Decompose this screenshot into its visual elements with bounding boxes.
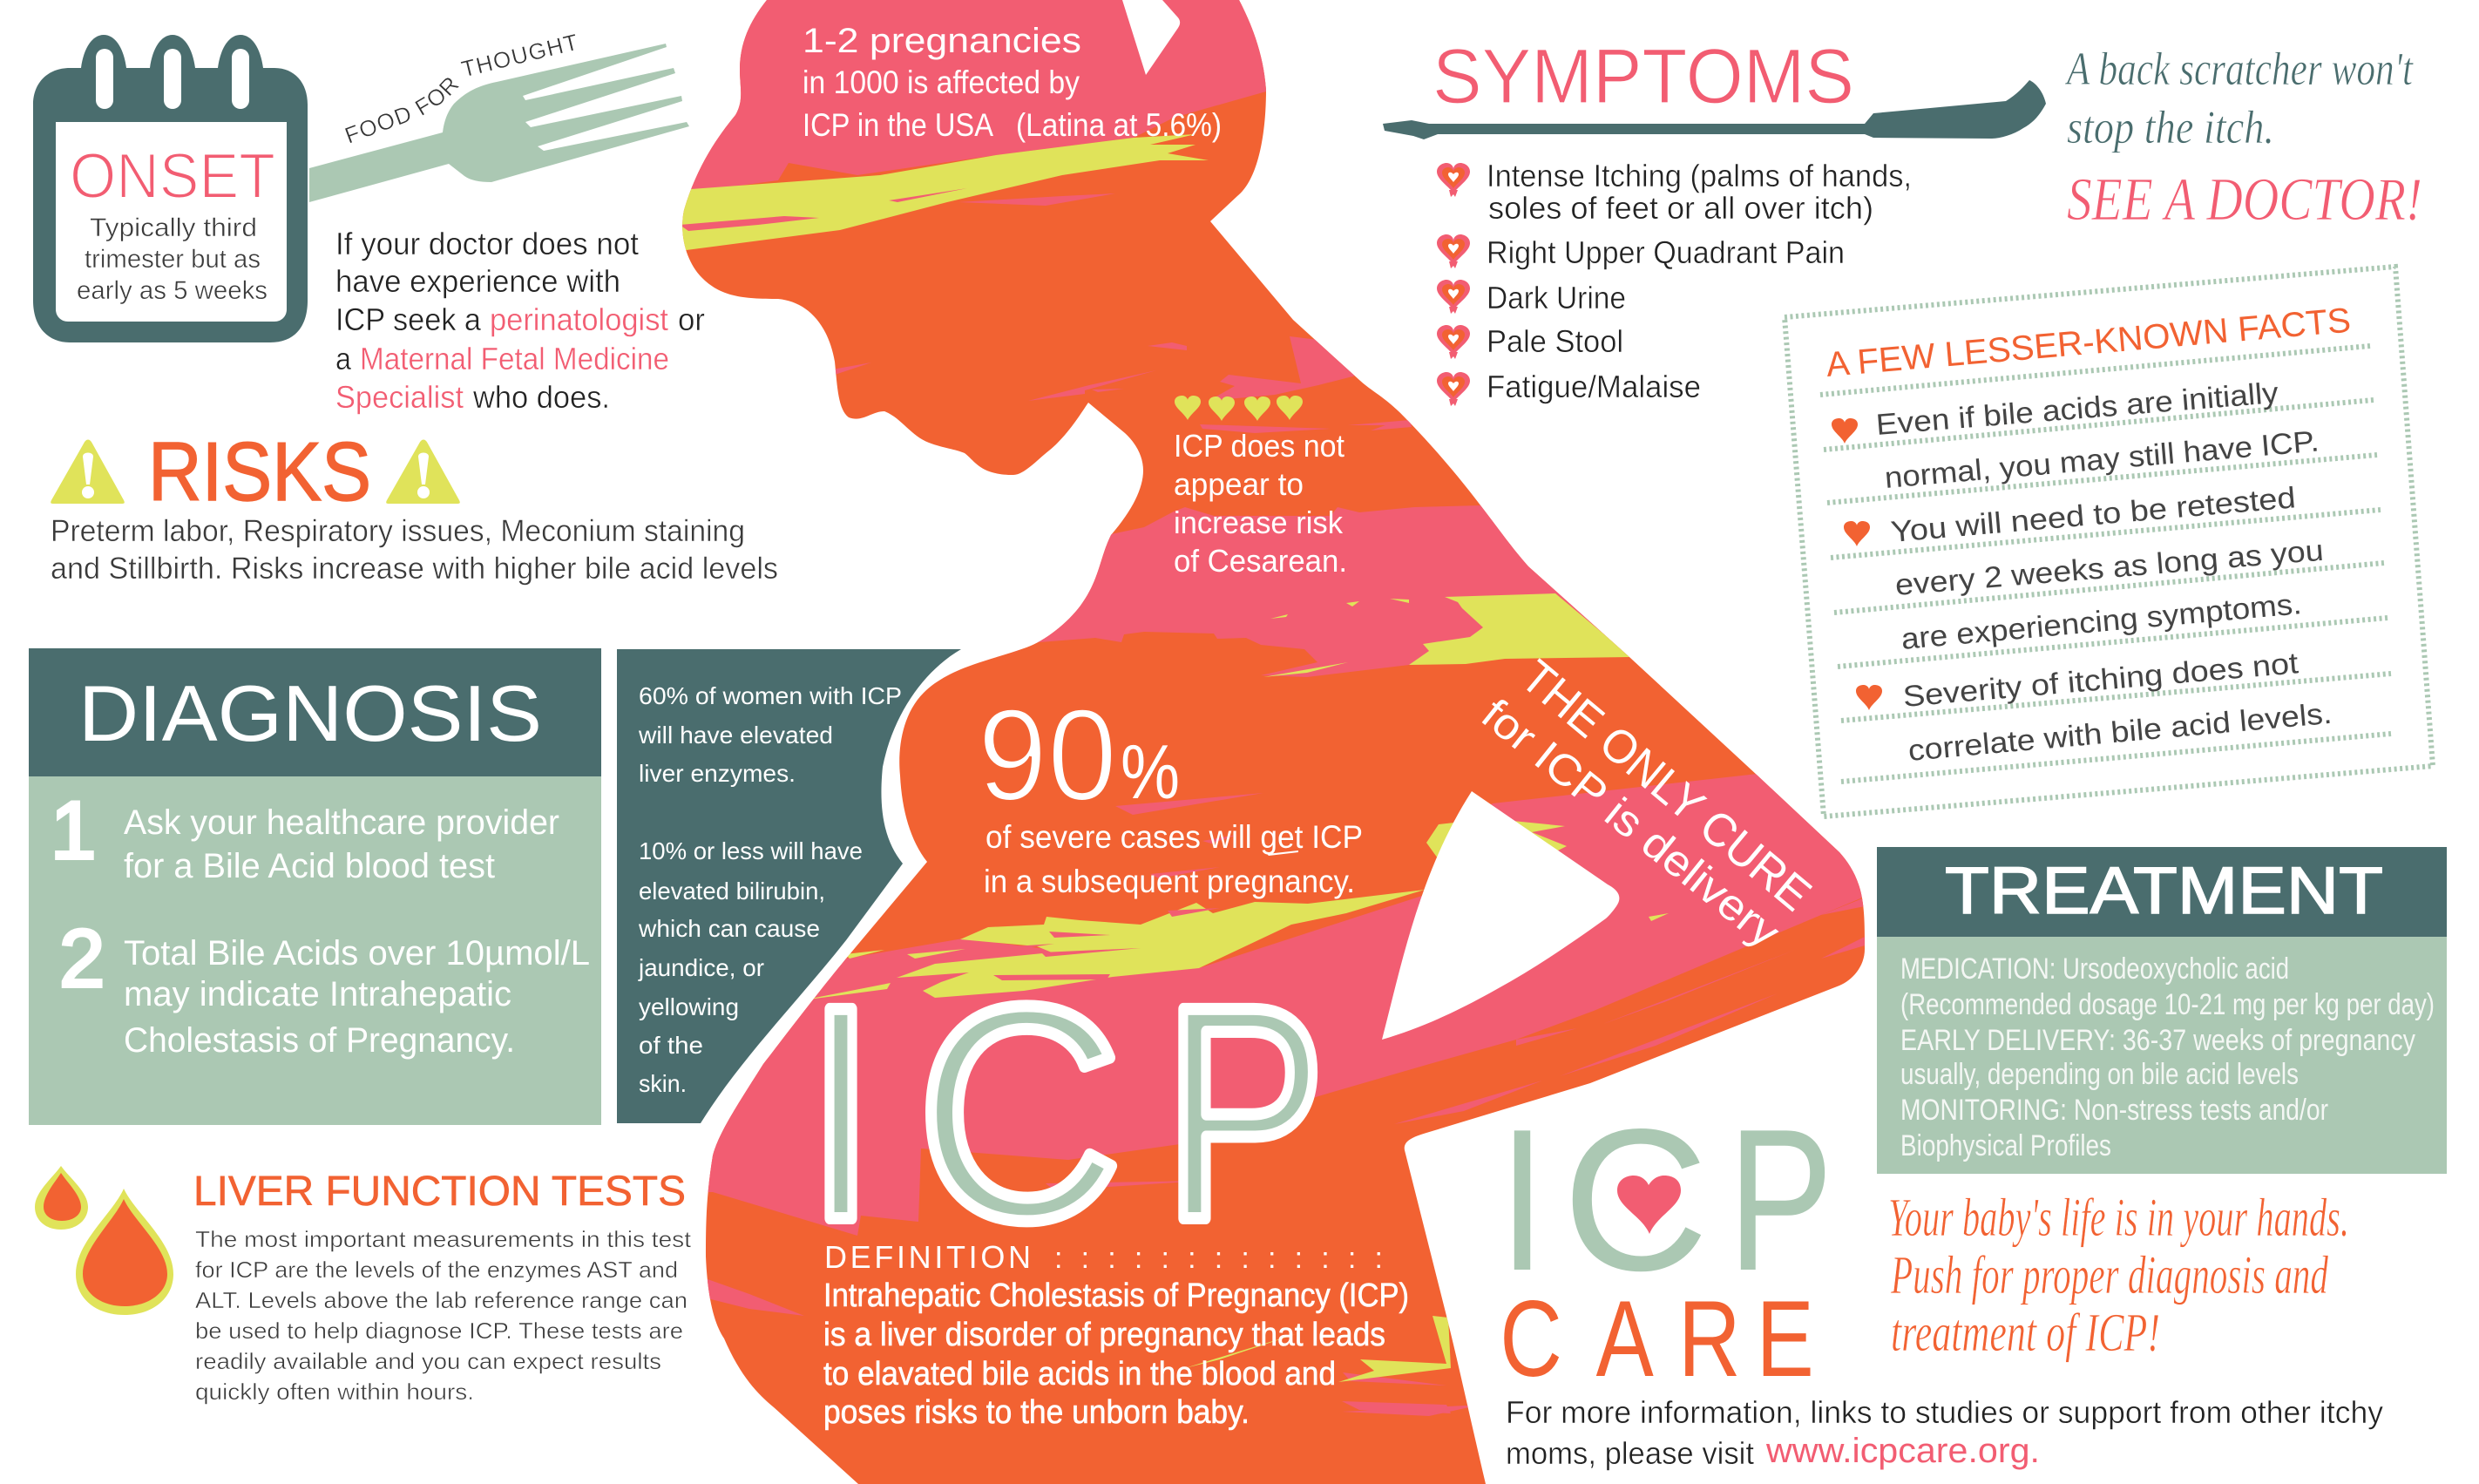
liver function tests text — [195, 1226, 692, 1405]
fork caption: food for thought: FOOD FOR THOUGHT — [345, 34, 575, 143]
panel: liver enzymes side note: skin. — [639, 1070, 687, 1097]
logo ICP letters: I — [1499, 1087, 1546, 1313]
treatment text: Biophysical Profiles — [1900, 1129, 2111, 1162]
icon: small liver drop — [35, 1166, 88, 1230]
diagnosis heading: DIAGNOSIS — [78, 670, 542, 758]
fact 2: every 2 weeks as long as you — [1894, 534, 2325, 602]
definition: : : : : : : : : : : : : : — [1054, 1242, 1383, 1275]
definition: DEFINITION — [824, 1239, 1031, 1275]
icon: four yellow hearts — [1175, 396, 1303, 421]
step 2: Total Bile Acids over 10µmol/L — [124, 934, 590, 972]
cesarean note: increase risk — [1174, 505, 1344, 540]
logo ICP letters — [1499, 1087, 1833, 1313]
symptom 4 text: Pale Stool — [1487, 323, 1623, 359]
onset text: early as 5 weeks — [77, 276, 268, 305]
panel: diagnosis — [29, 648, 601, 1125]
icon: warning triangle left — [51, 439, 125, 504]
symptom 1 text: soles of feet or all over itch) — [1488, 190, 1873, 226]
icon: symptom heart 1 — [1437, 163, 1470, 197]
step 1: 1 — [51, 784, 96, 876]
icon: symptom heart 5 — [1437, 372, 1470, 406]
symptoms list — [1437, 158, 1912, 406]
panel: liver enzymes side note: elevated bilirubin, — [639, 878, 825, 905]
fact 1 — [1875, 376, 2320, 495]
fact 3: correlate with bile acid levels. — [1907, 697, 2333, 768]
calendar frame — [33, 35, 308, 342]
doctor advice text: or — [678, 302, 705, 337]
90 percent statistic: of severe cases will get ICP — [986, 819, 1363, 855]
treatment text: MONITORING: Non-stress tests and/or — [1900, 1094, 2328, 1127]
footer contact text: moms, please visit — [1506, 1435, 1754, 1471]
step 2: may indicate Intrahepatic — [124, 975, 511, 1013]
risks text: Preterm labor, Respiratory issues, Meconium staining — [51, 514, 745, 548]
step 1: Ask your healthcare provider — [124, 803, 559, 842]
panel: onset calendar — [33, 35, 308, 342]
icon: fact heart 2 — [1844, 521, 1870, 546]
logo ICP letters: P — [1728, 1088, 1833, 1313]
fact 3: Severity of itching does not — [1901, 647, 2300, 714]
fact 3 — [1901, 647, 2333, 768]
pregnant silhouette — [662, 0, 1882, 1484]
doctor advice text: a — [335, 341, 352, 376]
cesarean note: ICP does not — [1174, 428, 1344, 464]
ICP Care logo — [1499, 1087, 1833, 1399]
risks text: and Stillbirth. Risks increase with higher bile acid levels — [51, 552, 778, 586]
panel: liver enzymes side note: jaundice, or — [638, 954, 764, 981]
doctor advice text: Maternal Fetal Medicine — [360, 341, 669, 376]
liver function tests text: be used to help diagnose ICP. These tests are — [195, 1318, 683, 1344]
prevalence text on head: (Latina at 5.6%) — [1016, 107, 1222, 143]
icon: back scratcher — [1383, 80, 2046, 139]
risks heading: RISKS — [148, 425, 371, 518]
cesarean note: of Cesarean. — [1174, 543, 1347, 579]
step 1: for a Bile Acid blood test — [124, 847, 495, 885]
large ICP lettering: P — [1163, 943, 1325, 1283]
definition: poses risks to the unborn baby. — [823, 1394, 1250, 1431]
onset text — [77, 213, 268, 305]
symptoms heading: SYMPTOMS — [1433, 32, 1854, 119]
handwritten note: baby's life: treatment of ICP! — [1891, 1304, 2160, 1363]
prevalence text on head — [803, 22, 1222, 143]
symptom 2 text: Right Upper Quadrant Pain — [1487, 234, 1845, 270]
definition: Intrahepatic Cholestasis of Pregnancy (ICP) — [823, 1277, 1409, 1314]
handwritten note: see a doctor: stop the itch. — [2067, 101, 2274, 153]
liver function tests text: The most important measurements in this test — [195, 1226, 692, 1252]
onset text: trimester but as — [85, 245, 261, 274]
definition: is a liver disorder of pregnancy that leads — [823, 1317, 1385, 1353]
panel: liver enzymes side note — [617, 649, 961, 1123]
symptom 3 text: Dark Urine — [1487, 280, 1626, 315]
panel: liver enzymes side note: 10% or less will have — [639, 837, 863, 864]
symptom 5 text: Fatigue/Malaise — [1487, 369, 1701, 404]
handwritten note: see a doctor — [2065, 43, 2422, 234]
definition — [823, 1239, 1409, 1431]
icon: symptom heart 3 — [1437, 280, 1470, 314]
90 percent statistic: 90 — [978, 681, 1117, 828]
prevalence text on head: in 1000 is affected by — [803, 64, 1080, 100]
90 percent statistic: in a subsequent pregnancy. — [984, 864, 1355, 899]
panel: liver enzymes side note: liver enzymes. — [639, 760, 796, 787]
step 2: Cholestasis of Pregnancy. — [124, 1021, 515, 1060]
onset heading: ONSET — [70, 141, 275, 212]
panel: liver enzymes side note: 60% of women with ICP — [639, 682, 902, 709]
treatment heading: TREATMENT — [1945, 854, 2383, 928]
icon: logo heart — [1617, 1176, 1681, 1234]
icon: fact heart 1 — [1832, 418, 1858, 444]
90 percent statistic — [978, 681, 1363, 899]
doctor advice text — [335, 226, 705, 415]
doctor advice text: ICP seek a — [335, 302, 482, 337]
panel: treatment — [1877, 847, 2447, 1174]
treatment text: MEDICATION: Ursodeoxycholic acid — [1900, 952, 2289, 986]
facts heading: A FEW LESSER-KNOWN FACTS — [1825, 302, 2353, 384]
symptom 1 text: Intense Itching (palms of hands, — [1487, 158, 1912, 193]
logo ICP letters: C — [1562, 1088, 1709, 1313]
treatment text: usually, depending on bile acid levels — [1900, 1058, 2299, 1091]
treatment text — [1900, 952, 2435, 1162]
icon: fork — [309, 44, 689, 202]
prevalence text on head: 1-2 pregnancies — [803, 22, 1081, 60]
the only cure callout: for ICP is delivery — [1473, 689, 1789, 957]
panel: liver enzymes side note: will have elevated — [638, 722, 833, 749]
icon: warning triangle right — [386, 439, 460, 504]
doctor advice text: perinatologist — [490, 302, 668, 337]
icon: large liver drop — [76, 1189, 173, 1315]
definition: to elavated bile acids in the blood and — [823, 1356, 1336, 1393]
panel: liver enzymes side note: which can cause — [638, 915, 820, 942]
liver function tests text: quickly often within hours. — [195, 1379, 474, 1405]
the only cure callout: THE ONLY CURE — [1511, 650, 1821, 921]
fact 2 — [1889, 481, 2325, 656]
icon: symptom heart 4 — [1437, 325, 1470, 359]
risks text — [51, 514, 778, 586]
step 1 — [51, 784, 559, 885]
doctor advice text: who does. — [472, 379, 610, 415]
liver function tests text: readily available and you can expect results — [195, 1348, 661, 1374]
panel: liver enzymes side note: yellowing — [639, 993, 739, 1020]
panel: liver enzymes side note: of the — [639, 1032, 703, 1059]
cesarean note — [1174, 428, 1347, 579]
large ICP lettering: C — [917, 943, 1122, 1283]
logo CARE: CARE — [1500, 1277, 1814, 1399]
footer contact text: For more information, links to studies or support from other itchy — [1506, 1394, 2383, 1430]
fact 1: Even if bile acids are initially — [1875, 376, 2279, 442]
liver function tests text: ALT. Levels above the lab reference range can — [195, 1287, 687, 1313]
liver function tests text: for ICP are the levels of the enzymes AST and — [195, 1257, 678, 1283]
icon: symptom heart 2 — [1437, 234, 1470, 268]
prevalence text on head: ICP in the USA — [803, 107, 993, 143]
large ICP lettering — [807, 943, 1325, 1283]
icon: fact heart 3 — [1856, 685, 1882, 710]
fact 1: normal, you may still have ICP. — [1883, 424, 2320, 495]
symptom 1 text — [1487, 158, 1912, 226]
90 percent statistic: % — [1121, 728, 1180, 815]
cesarean note: appear to — [1174, 466, 1304, 502]
fact 2: You will need to be retested — [1889, 481, 2297, 549]
handwritten note: baby's life — [1888, 1189, 2349, 1363]
liver function tests heading: LIVER FUNCTION TESTS — [193, 1169, 686, 1215]
doctor advice text: If your doctor does not — [335, 226, 639, 261]
onset text: Typically third — [90, 213, 257, 242]
step 2 — [59, 912, 590, 1060]
doctor advice text: have experience with — [335, 263, 620, 299]
step 2: 2 — [59, 912, 105, 1004]
panel: lesser-known facts — [1785, 267, 2433, 817]
doctor advice text: Specialist — [335, 379, 464, 415]
white hair gap in head — [1122, 0, 1180, 75]
large ICP lettering: I — [807, 943, 875, 1283]
footer contact text — [1506, 1394, 2383, 1471]
footer contact text: www.icpcare.org. — [1765, 1432, 2040, 1470]
fact 2: are experiencing symptoms. — [1900, 587, 2303, 656]
white gap of folded arm — [1382, 791, 1619, 1040]
